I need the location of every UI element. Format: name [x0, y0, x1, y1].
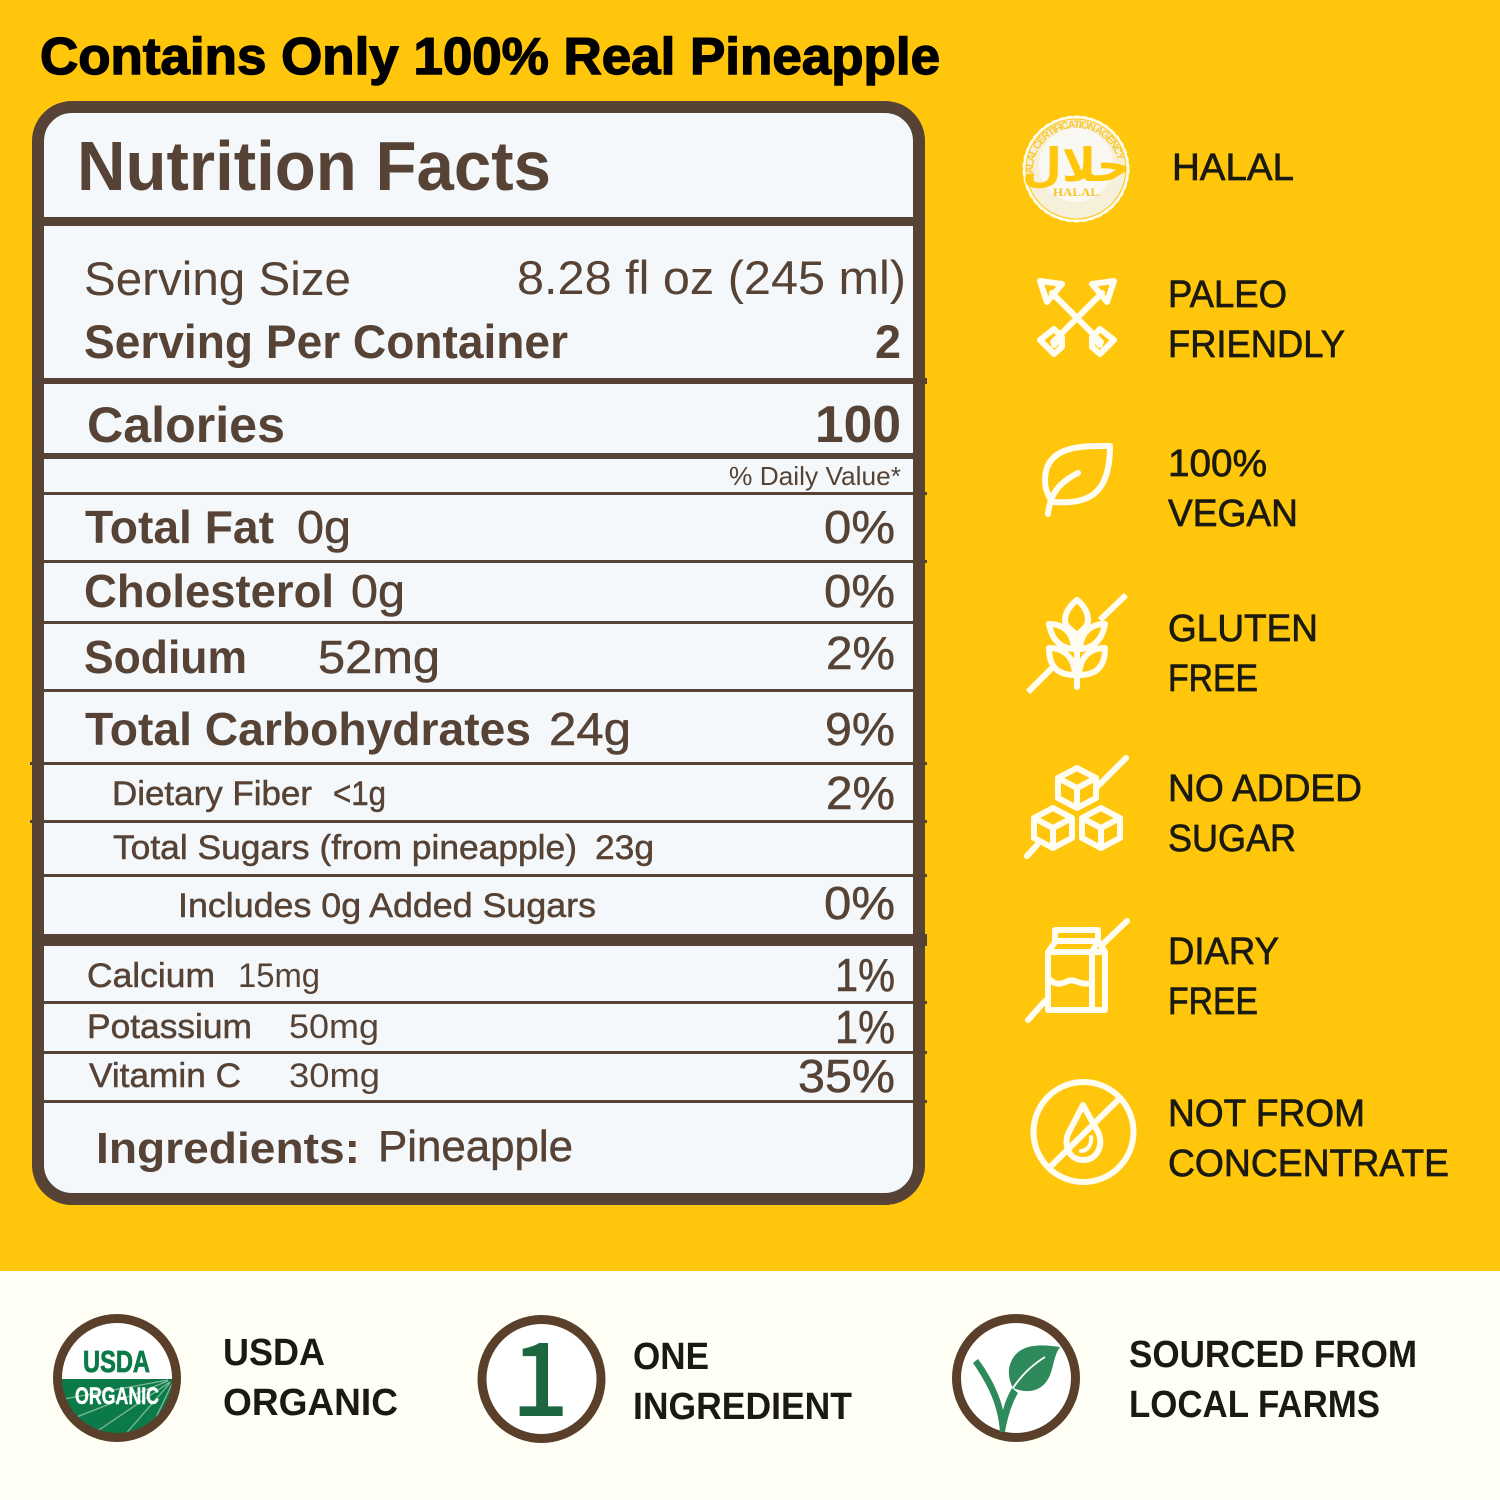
label: usda organic: USDA: [223, 1332, 325, 1374]
row: potassium: Potassium: [87, 1008, 252, 1046]
label: usda organic: ORGANIC: [223, 1382, 398, 1424]
label: one ingredient: ONE: [633, 1336, 709, 1378]
row: ingredients: Pineapple: [378, 1122, 573, 1171]
label: sourced from local farms: [1129, 1334, 1417, 1426]
row: ingredients: [96, 1122, 573, 1173]
row: dietary fiber: Dietary Fiber: [112, 775, 312, 813]
label: paleo friendly: [1168, 274, 1345, 366]
row: calories: 100: [815, 396, 901, 454]
row: vitamin c: 30mg: [289, 1057, 380, 1095]
label: one ingredient: [633, 1336, 852, 1428]
icon: usda organic seal: USDA: [83, 1344, 150, 1379]
row: calories: Calories: [87, 397, 285, 453]
label: 100% vegan: 100%: [1168, 443, 1267, 485]
label: no added sugar: NO ADDED: [1168, 768, 1362, 810]
icon: halal seal: حلال: [1022, 138, 1130, 192]
daily value label: % Daily Value*: [729, 461, 901, 491]
label: gluten free: [1168, 608, 1318, 700]
row: total carbohydrates: [85, 703, 895, 755]
row: cholesterol: 0g: [351, 565, 405, 617]
row: vitamin c: Vitamin C: [89, 1057, 241, 1095]
title: Contains Only 100% Real Pineapple: [40, 28, 940, 86]
heading: nutrition facts: Nutrition Facts: [77, 127, 551, 205]
row: potassium: 50mg: [289, 1008, 379, 1046]
row: vitamin c: [89, 1050, 895, 1102]
label: 100% vegan: VEGAN: [1168, 493, 1298, 535]
row: serving per container: Serving Per Container: [84, 315, 568, 368]
icon: gluten free wheat: [1028, 595, 1126, 692]
row: added sugars: [178, 877, 895, 929]
icon: halal seal: HALAL CERTIFICATION AGENCY: [1026, 120, 1125, 180]
row: total sugars: 23g: [595, 829, 654, 867]
row: serving size: 8.28 fl oz (245 ml): [517, 251, 906, 304]
label: 100% vegan: [1168, 443, 1298, 535]
row: potassium: 1%: [835, 1001, 895, 1053]
row: ingredients: Ingredients:: [96, 1124, 360, 1173]
row: sodium: 52mg: [318, 631, 440, 683]
icon: not from concentrate: [1034, 1082, 1134, 1182]
row: calcium: 15mg: [238, 957, 320, 995]
label: no added sugar: [1168, 768, 1362, 860]
row: total carbohydrates: 9%: [825, 703, 895, 755]
icon: usda organic seal: ORGANIC: [75, 1383, 159, 1410]
label: no added sugar: SUGAR: [1168, 818, 1296, 860]
label: gluten free: FREE: [1168, 658, 1258, 700]
label: not from concentrate: CONCENTRATE: [1168, 1143, 1449, 1185]
icon: halal seal: [1022, 116, 1130, 222]
row: total fat: [85, 501, 895, 553]
label: sourced from local farms: LOCAL FARMS: [1129, 1384, 1380, 1426]
row: added sugars: Includes 0g Added Sugars: [178, 887, 596, 925]
label: not from concentrate: NOT FROM: [1168, 1093, 1365, 1135]
row: cholesterol: 0%: [824, 565, 895, 617]
icon: usda organic seal: [55, 1316, 179, 1442]
row: cholesterol: [84, 565, 895, 617]
icon: halal seal: HALAL: [1053, 187, 1099, 199]
row: serving per container: [84, 315, 901, 368]
row: serving per container: 2: [875, 315, 901, 368]
row: calcium: Calcium: [87, 957, 215, 995]
row: total carbohydrates: 24g: [549, 703, 631, 755]
row: cholesterol: Cholesterol: [84, 565, 334, 617]
bottom band: [0, 1271, 1500, 1500]
row: dietary fiber: [112, 767, 895, 819]
icon: leaf: [1045, 446, 1110, 514]
label: halal: HALAL: [1172, 147, 1294, 189]
label: usda organic: [223, 1332, 398, 1424]
row: dietary fiber: 2%: [826, 767, 895, 819]
row: added sugars: 0%: [824, 877, 895, 929]
label: one ingredient: INGREDIENT: [633, 1386, 852, 1428]
icon: crossed arrows: [1040, 281, 1114, 354]
row: dietary fiber: <1g: [333, 775, 386, 813]
icon: one ingredient badge: 1: [511, 1299, 569, 1446]
row: serving size: [84, 251, 906, 305]
row: vitamin c: 35%: [798, 1050, 895, 1102]
icon: dairy free carton: [1028, 921, 1127, 1020]
icon: one ingredient badge: [482, 1299, 601, 1446]
table rules: [30, 217, 927, 1103]
row: calories: [87, 396, 901, 454]
row: total sugars: Total Sugars (from pineapple): [113, 829, 577, 867]
label: diary free: FREE: [1168, 981, 1258, 1023]
row: sodium: 2%: [826, 627, 895, 679]
label: not from concentrate: [1168, 1093, 1449, 1185]
row: calcium: [87, 949, 895, 1001]
row: serving size: Serving Size: [84, 252, 351, 305]
label: gluten free: GLUTEN: [1168, 608, 1318, 650]
row: sodium: Sodium: [84, 631, 247, 683]
row: calcium: 1%: [835, 949, 895, 1001]
row: total fat: 0%: [824, 501, 895, 553]
panel: nutrition facts: [30, 107, 927, 1199]
label: paleo friendly: PALEO: [1168, 274, 1287, 316]
icon: local farms leaf badge: [956, 1318, 1076, 1438]
row: sodium: [84, 627, 895, 683]
row: total carbohydrates: Total Carbohydrates: [85, 703, 531, 755]
label: sourced from local farms: SOURCED FROM: [1129, 1334, 1417, 1376]
label: paleo friendly: FRIENDLY: [1168, 324, 1345, 366]
icon: no added sugar cubes: [1027, 758, 1126, 856]
label: diary free: [1168, 931, 1279, 1023]
row: total fat: Total Fat: [85, 501, 274, 553]
label: diary free: DIARY: [1168, 931, 1279, 973]
row: total fat: 0g: [297, 501, 351, 553]
panel frame: [38, 107, 919, 1199]
row: potassium: [87, 1001, 895, 1053]
